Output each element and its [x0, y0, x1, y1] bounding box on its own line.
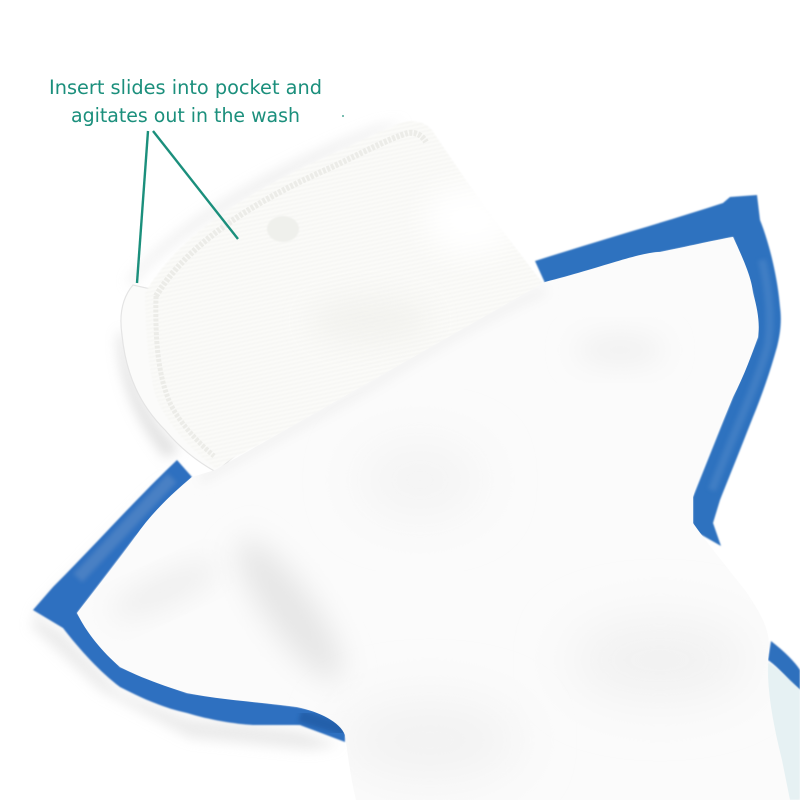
insert: terry panel — [145, 121, 547, 468]
muted binding highlight — [78, 478, 172, 578]
elastic leg and outer shell — [767, 641, 800, 800]
soft drop shadows — [30, 122, 405, 750]
dark binding edge — [300, 716, 345, 730]
caption: Insert slides into pocket and — [49, 76, 322, 99]
terry shading — [310, 296, 430, 344]
stray dot — [342, 115, 344, 117]
blue binding: lower left — [33, 460, 345, 742]
lighter binding stripes — [712, 260, 770, 490]
caption: agitates out in the wash — [71, 104, 300, 127]
fleece liner — [77, 237, 790, 800]
caption — [49, 76, 322, 127]
snap — [267, 216, 299, 242]
leader line to front of insert — [153, 131, 238, 239]
stitched border — [156, 133, 426, 296]
blue binding: leg corner — [768, 641, 800, 690]
fold shadow from left pocket — [200, 290, 545, 480]
fold shadow centre — [238, 543, 342, 677]
leader line to back of insert — [137, 131, 148, 283]
blue binding: top right — [535, 195, 781, 546]
insert: back layer — [121, 285, 300, 472]
pale blue elastic — [767, 662, 800, 800]
